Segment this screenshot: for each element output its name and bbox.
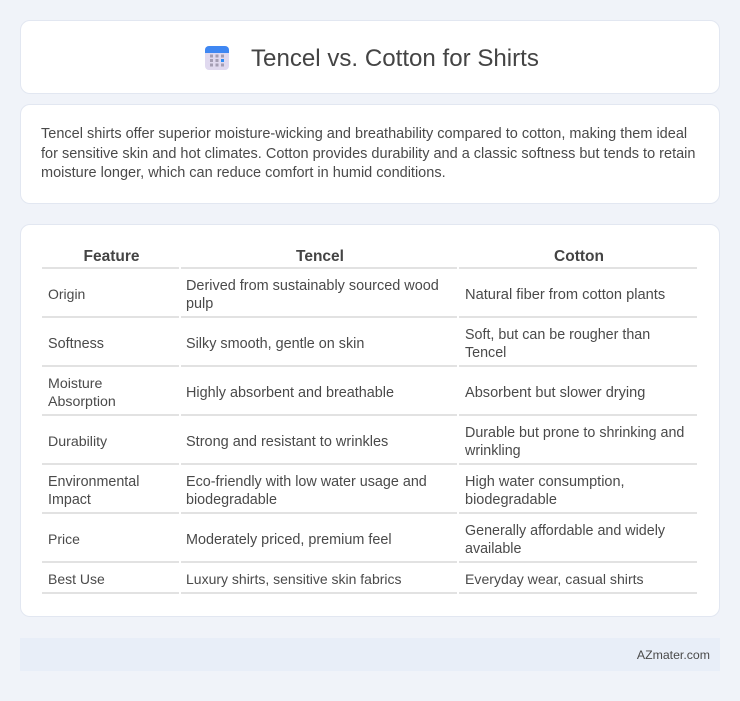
row: durability cotton: wrinkling [465, 443, 521, 459]
row: softness tencel: Silky smooth, gentle on skin [186, 336, 364, 352]
row: price tencel: Moderately priced, premium feel [186, 532, 392, 548]
table header: feature: Feature [84, 248, 140, 265]
row: durability tencel: Strong and resistant to wrinkles [186, 434, 388, 450]
icon: calendar [205, 46, 229, 70]
row: environmental label: Environmental [48, 474, 139, 490]
summary text [41, 126, 695, 181]
row: origin tencel: pulp [186, 296, 213, 312]
footer source: AZmater.com [637, 648, 710, 662]
row: softness cotton: Soft, but can be rougher than [465, 327, 650, 343]
row: durability cotton [465, 425, 684, 459]
row: environmental cotton: biodegradable [465, 492, 557, 508]
footer [20, 638, 720, 671]
summary card [20, 104, 720, 204]
table card [20, 224, 720, 617]
row: moisture label [48, 376, 116, 410]
row: environmental label: Impact [48, 492, 91, 508]
summary text: Tencel shirts offer superior moisture-wicking and breathability compared to cotton, making them ideal [41, 126, 687, 142]
row: price cotton: available [465, 541, 521, 557]
summary text: for sensitive skin and hot climates. Cotton provides durability and a classic softness but tends to retain [41, 146, 695, 162]
row: softness label: Softness [48, 336, 104, 352]
row: softness cotton: Tencel [465, 345, 506, 361]
row: origin tencel [186, 278, 439, 312]
row: origin cotton: Natural fiber from cotton plants [465, 287, 665, 303]
row: durability label: Durability [48, 434, 107, 450]
row: environmental tencel: Eco-friendly with low water usage and [186, 474, 427, 490]
title: Tencel vs. Cotton for Shirts [251, 45, 539, 72]
row: environmental tencel: biodegradable [186, 492, 277, 508]
row: environmental tencel [186, 474, 427, 508]
row: environmental label [48, 474, 139, 508]
row: moisture label: Absorption [48, 394, 116, 410]
row: environmental cotton: High water consumption, [465, 474, 625, 490]
row: best use tencel: Luxury shirts, sensitive skin fabrics [186, 571, 402, 587]
row: moisture tencel: Highly absorbent and breathable [186, 385, 394, 401]
row: moisture label: Moisture [48, 376, 102, 392]
row: softness cotton [465, 327, 650, 361]
header card [20, 20, 720, 94]
row: origin label: Origin [48, 286, 85, 302]
row: price label: Price [48, 531, 80, 547]
row: best use cotton: Everyday wear, casual shirts [465, 571, 644, 587]
table header: tencel: Tencel [296, 248, 344, 265]
row: origin tencel: Derived from sustainably sourced wood [186, 278, 439, 294]
table header: cotton: Cotton [554, 248, 604, 265]
row: durability cotton: Durable but prone to shrinking and [465, 425, 684, 441]
row: best use label: Best Use [48, 571, 105, 587]
row: price cotton: Generally affordable and widely [465, 523, 665, 539]
row: moisture cotton: Absorbent but slower drying [465, 385, 645, 401]
summary text: moisture longer, which can reduce comfort in humid conditions. [41, 165, 446, 181]
row: environmental cotton [465, 474, 625, 508]
row: price cotton [465, 523, 665, 557]
